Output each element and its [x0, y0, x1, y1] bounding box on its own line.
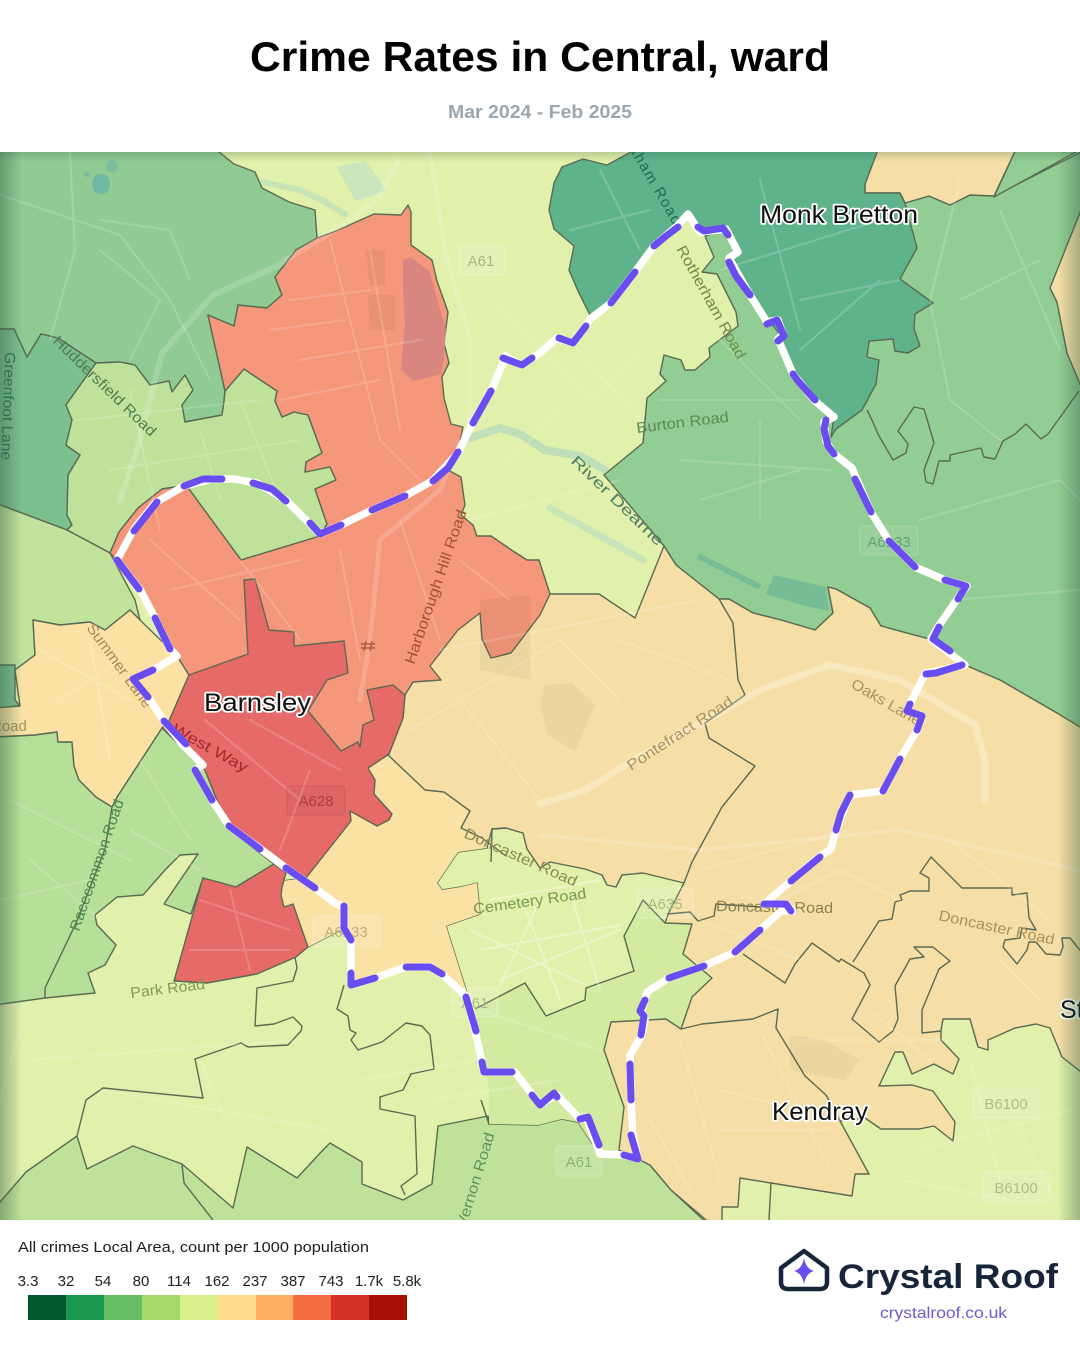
legend title: All crimes Local Area, count per 1000 population — [18, 1239, 369, 1256]
area: cemetery side green — [475, 900, 712, 1155]
road name labels: River Dearne — [567, 453, 667, 550]
road name labels: Pontefract Road — [624, 693, 736, 774]
road name labels: Vernon Road — [454, 1130, 498, 1229]
road shield labels: A635 — [647, 896, 683, 913]
legend value labels: 114 — [167, 1273, 191, 1290]
road name labels: Burton Road — [635, 409, 730, 437]
road shield labels: A61 — [468, 253, 494, 270]
legend value labels: 3.3 — [18, 1273, 38, 1290]
road name labels: Doncaster Road — [937, 907, 1056, 948]
brand name: Crystal Roof — [838, 1258, 1059, 1296]
edge vignette — [0, 152, 1080, 1220]
legend value labels: 5.8k — [393, 1273, 422, 1290]
water features — [262, 162, 643, 560]
legend value labels: 54 — [95, 1273, 111, 1290]
area: top-right green triangle — [994, 147, 1080, 197]
area: Barnsley red centre — [162, 579, 405, 878]
road name labels: tham Road — [628, 146, 685, 228]
road shield labels: B6100 — [994, 1180, 1038, 1197]
legend value labels: 80 — [133, 1273, 149, 1290]
area: southern green band — [0, 1116, 709, 1225]
road name labels — [0, 146, 1056, 1229]
boundary lines — [45, 391, 1080, 1220]
place label: Barnsley: Barnsley — [204, 689, 312, 717]
road name labels: Doncaster Road — [716, 898, 833, 917]
station icon — [361, 641, 375, 651]
area: lighter cream around A6133 — [282, 847, 487, 992]
road name labels: Oaks Lane — [848, 676, 924, 729]
legend value labels: 743 — [318, 1273, 344, 1290]
brand url: crystalroof.co.uk — [880, 1305, 1008, 1322]
legend value labels: 1.7k — [355, 1273, 384, 1290]
road network — [0, 152, 1080, 1210]
ward boundary: white base line — [117, 214, 967, 1159]
map base: low-crime lime areas — [0, 152, 1080, 1220]
area: right-edge cream sliver — [1050, 200, 1080, 396]
road shield labels: A6133 — [324, 924, 368, 941]
road name labels: Rotherham Road — [673, 243, 749, 362]
road name labels: Harborough Hill Road — [402, 508, 471, 666]
legend — [18, 1239, 422, 1320]
road shield labels: A61 — [462, 995, 488, 1012]
road name labels: Cemetery Road — [472, 885, 587, 918]
legend value labels: 162 — [204, 1273, 230, 1290]
road shield labels: A628 — [298, 793, 334, 810]
road name labels: Racecommon Road — [67, 797, 128, 933]
area: Huddersfield Road light green — [66, 362, 336, 560]
area: mauve patch — [401, 257, 446, 381]
area: medium green east — [604, 150, 1080, 731]
area: far-west darker green — [0, 329, 96, 530]
road shields — [287, 246, 1050, 1202]
road shield labels: B6100 — [984, 1096, 1028, 1113]
road shield labels — [298, 253, 1038, 1197]
road shield labels: A61 — [566, 1154, 592, 1171]
legend value labels: 237 — [242, 1273, 268, 1290]
road shield labels: A6133 — [867, 534, 911, 551]
area: central salmon — [110, 205, 550, 878]
date range subtitle: Mar 2024 - Feb 2025 — [448, 101, 632, 122]
area: west light green — [0, 503, 140, 672]
legend value labels: 32 — [58, 1273, 74, 1290]
area: west cream — [0, 610, 189, 807]
area: Monk Bretton dark green — [549, 147, 933, 437]
ponds — [84, 160, 829, 611]
ward boundary: purple dashes — [117, 227, 966, 1159]
area: southern red block — [174, 864, 308, 983]
road name labels: Doncaster Road — [461, 825, 580, 890]
brand logo — [781, 1251, 1059, 1322]
place label: Kendray: Kendray — [772, 1098, 869, 1126]
road name labels: West Way — [169, 721, 251, 777]
icon: house with star — [781, 1251, 827, 1289]
road name labels: Summer Lane — [83, 620, 155, 711]
river along green/cream boundary — [672, 558, 680, 568]
title: Crime Rates in Central, ward — [250, 33, 830, 80]
legend value labels — [18, 1273, 422, 1290]
area: south-west green — [0, 728, 274, 1005]
place label: Monk Bretton: Monk Bretton — [760, 201, 918, 229]
legend value labels: 387 — [280, 1273, 306, 1290]
area: north-west green — [0, 147, 317, 422]
road name labels: Huddersfield Road — [49, 333, 160, 440]
area: small dark-green strip — [0, 665, 20, 708]
area: large cream south-east — [281, 546, 1080, 1225]
road name labels: Park Road — [129, 976, 206, 1002]
legend colour scale — [28, 1295, 407, 1320]
area: top-right cream — [865, 147, 1017, 205]
building patches — [365, 250, 860, 1080]
